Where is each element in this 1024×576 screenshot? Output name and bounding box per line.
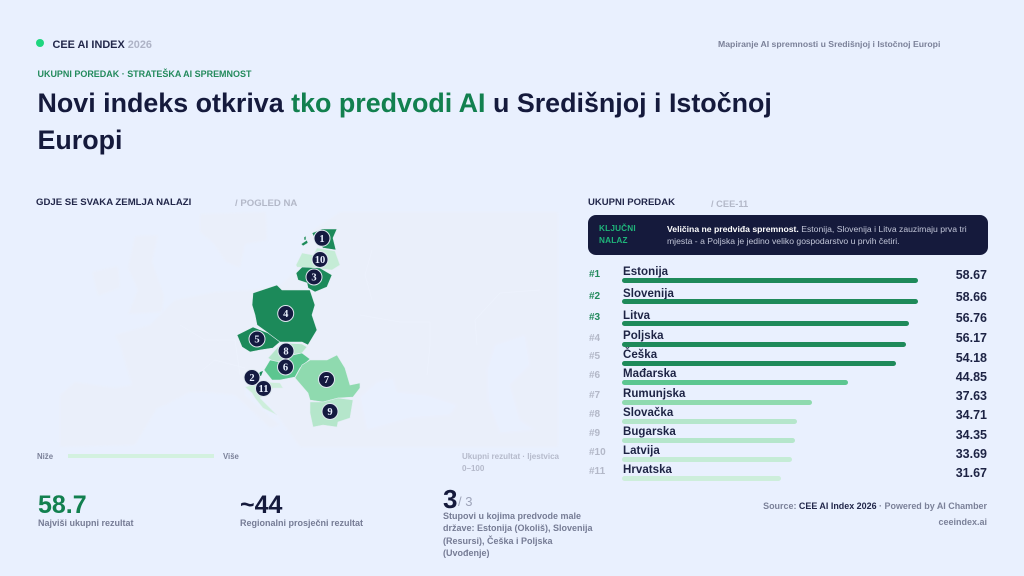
row 7 Romania: Rumunjska (623, 388, 685, 400)
row 5 Czechia (589, 347, 987, 366)
row 3 Lithuania: Litva (623, 310, 650, 322)
row 8 Slovakia: 34.71 (956, 408, 987, 422)
row 1 Estonia: #1 (589, 269, 600, 280)
marker 3 Lithuania: 3 (311, 272, 317, 284)
country: Slovenia (258, 371, 263, 376)
stat description: (Uvođenje) (443, 548, 490, 558)
row 5 Czechia: Češka (623, 349, 657, 361)
legend high label: Više (223, 452, 239, 461)
row 7 Romania: #7 (589, 390, 600, 401)
row 1 Estonia (589, 266, 987, 283)
marker 10 Latvia (312, 252, 328, 268)
marker 2 Slovenia: 2 (249, 373, 255, 384)
map rank markers (244, 230, 338, 420)
row 10 Latvia: #10 (589, 447, 606, 458)
country: Hungary (264, 353, 310, 380)
marker 5 Czechia: 5 (254, 334, 260, 346)
row 9 Bulgaria (589, 426, 987, 443)
key finding text: Veličina ne predviđa spremnost. Estonija, Slovenija i Litva zauzimaju prva tri (667, 224, 967, 234)
row 6 Hungary: #6 (589, 370, 600, 381)
row 1 Estonia: Estonija (623, 266, 668, 278)
highlighted countries (237, 229, 360, 427)
stat description: (Resursi), Češka i Poljska (443, 536, 553, 546)
country: Estonia (301, 229, 337, 250)
legend scale note: 0–100 (462, 464, 484, 472)
row 3 Lithuania (589, 310, 987, 326)
marker 7 Romania (318, 372, 334, 388)
row 4 Poland: Poljska (623, 330, 664, 342)
stat: regional average (240, 491, 363, 528)
country: Croatia (245, 382, 283, 415)
key finding label: NALAZ (599, 236, 628, 245)
stat value: 3 (443, 484, 457, 514)
marker 2 Slovenia (244, 370, 260, 386)
country: Bulgaria (310, 398, 353, 427)
ranking heading: UKUPNI POREDAK (588, 196, 675, 208)
marker 11 Croatia: 11 (259, 384, 268, 395)
row 10 Latvia: Latvija (623, 445, 660, 457)
marker 10 Latvia: 10 (315, 255, 325, 266)
stat: top score (38, 491, 134, 528)
row 6 Hungary (589, 368, 987, 385)
source line: Source: CEE AI Index 2026 · Powered by AI Chamber (763, 501, 987, 511)
row 7 Romania: 37.63 (956, 389, 987, 403)
row 9 Bulgaria: Bugarska (623, 426, 676, 438)
icon: green status dot (36, 39, 44, 47)
row 8 Slovakia (589, 406, 987, 424)
map legend (37, 452, 239, 461)
row 3 Lithuania: #3 (589, 312, 600, 323)
marker 5 Czechia (249, 331, 265, 347)
row 4 Poland (589, 330, 987, 347)
key finding text: mjesta - a Poljska je jedino veliko gospodarstvo u prvih četiri. (667, 236, 900, 246)
stat denominator: / 3 (458, 494, 472, 509)
map heading: GDJE SE SVAKA ZEMLJA NALAZI (36, 196, 191, 208)
legend low label: Niže (37, 452, 53, 461)
row 3 Lithuania: 56.76 (956, 311, 987, 325)
row 11 Croatia: #11 (589, 466, 605, 477)
legend scale note (462, 452, 559, 472)
header brand (36, 38, 152, 50)
marker 1 Estonia: 1 (319, 234, 325, 245)
row 2 Slovenia (589, 288, 987, 304)
row 10 Latvia (589, 445, 987, 462)
marker 3 Lithuania (306, 269, 322, 285)
country: Lithuania (296, 267, 332, 292)
stat: pillars (443, 484, 593, 558)
row 11 Croatia (589, 464, 987, 481)
country: Slovakia (268, 343, 307, 362)
row 10 Latvia: 33.69 (956, 447, 987, 461)
map heading suffix: / POGLED NA (235, 198, 297, 208)
stat description (443, 511, 593, 558)
stat label: Regionalni prosječni rezultat (240, 518, 363, 528)
row 11 Croatia: Hrvatska (623, 464, 672, 476)
stat description: Stupovi u kojima predvode male (443, 511, 581, 521)
country: Czechia (237, 327, 280, 352)
website link: ceeindex.ai (938, 517, 987, 527)
marker 8 Slovakia: 8 (283, 346, 289, 358)
panel: key finding (588, 215, 988, 255)
marker 11 Croatia (256, 380, 272, 396)
key finding text (667, 224, 967, 246)
row 4 Poland: #4 (589, 333, 600, 344)
row 7 Romania (589, 388, 987, 405)
country: Latvia (296, 248, 340, 270)
stat value: 58.7 (38, 491, 87, 519)
row 4 Poland: 56.17 (956, 331, 987, 345)
row 6 Hungary: 44.85 (956, 370, 987, 384)
row 6 Hungary: Mađarska (623, 368, 676, 380)
row 2 Slovenia: 58.66 (956, 290, 987, 304)
stat description: države: Estonija (Okoliš), Slovenija (443, 523, 593, 533)
legend gradient bar (68, 454, 214, 458)
row 5 Czechia: #5 (589, 351, 600, 362)
row 2 Slovenia: Slovenija (623, 288, 674, 300)
faint borders (180, 250, 540, 375)
title: Europi (38, 125, 123, 155)
marker 4 Poland: 4 (283, 309, 289, 320)
row 2 Slovenia: #2 (589, 291, 600, 302)
row 9 Bulgaria: #9 (589, 428, 600, 439)
row 11 Croatia: 31.67 (956, 466, 987, 480)
country: Romania (295, 355, 360, 402)
marker 1 Estonia (314, 230, 330, 246)
eyebrow: UKUPNI POREDAK · STRATEŠKA AI SPREMNOST (38, 68, 251, 78)
marker 4 Poland (278, 306, 294, 322)
marker 6 Hungary (278, 359, 294, 375)
background land (60, 212, 558, 447)
marker 8 Slovakia (278, 343, 294, 359)
marker 9 Bulgaria (322, 404, 338, 420)
ranking heading suffix: / CEE-11 (711, 198, 748, 208)
brand name: CEE AI INDEX 2026 (52, 38, 152, 50)
title: Novi indeks otkriva tko predvodi AI u Središnjoj i Istočnoj (38, 88, 772, 118)
row 9 Bulgaria: 34.35 (956, 428, 987, 442)
marker 9 Bulgaria: 9 (327, 407, 333, 418)
key finding label (599, 224, 636, 245)
row 8 Slovakia: Slovačka (623, 407, 673, 419)
row 8 Slovakia: #8 (589, 409, 600, 420)
title (38, 88, 772, 155)
row 5 Czechia: 54.18 (956, 351, 987, 365)
stat label: Najviši ukupni rezultat (38, 518, 134, 528)
stat value: ~44 (240, 491, 282, 519)
key finding label: KLJUČNI (599, 224, 636, 233)
country: Poland (252, 285, 317, 345)
row 1 Estonia: 58.67 (956, 268, 987, 282)
marker 6 Hungary: 6 (283, 362, 288, 374)
header tagline: Mapiranje AI spremnosti u Središnjoj i Istočnoj Europi (718, 39, 940, 49)
legend scale note: Ukupni rezultat · ljestvica (462, 452, 559, 461)
marker 7 Romania: 7 (324, 375, 329, 386)
